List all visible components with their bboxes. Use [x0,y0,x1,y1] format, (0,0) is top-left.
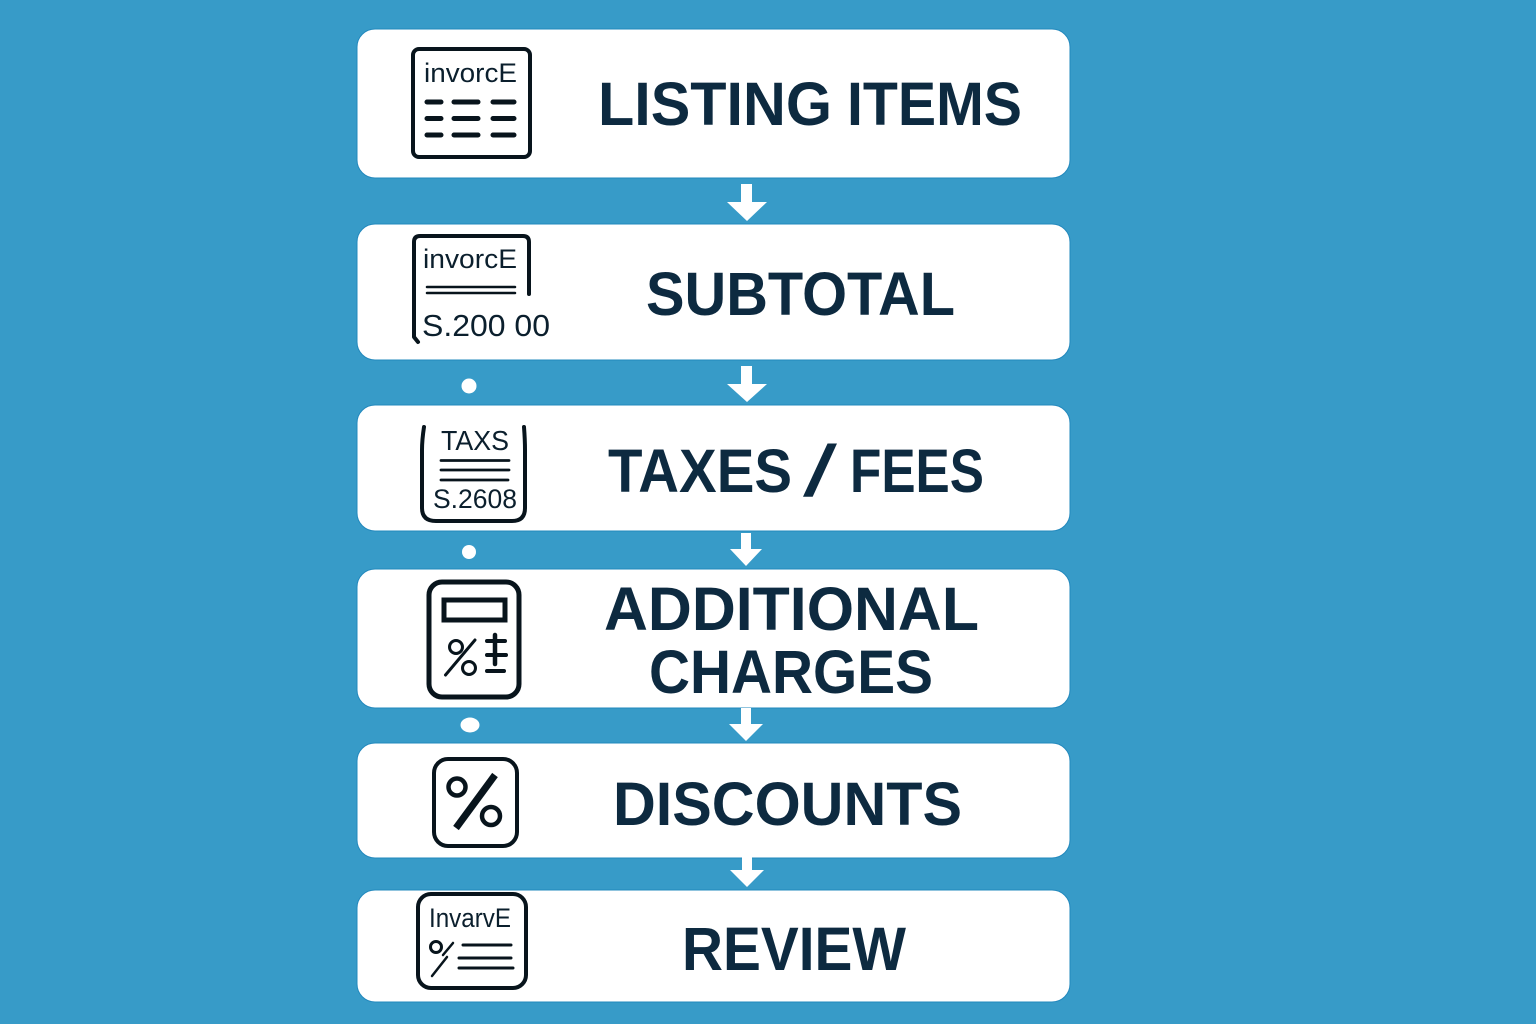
icon: invoice with subtotal amount: invorcE [423,244,517,274]
arrow: discounts to review [730,857,764,887]
icon: invoice review [418,894,526,988]
icon: invoice with subtotal amount: S.200 00 [422,308,550,343]
heading: listing items: LISTING [598,70,832,138]
panel: listing items [357,29,1070,178]
heading: discounts: DISCOUNTS [613,770,962,838]
heading: subtotal: SUBTOTAL [646,260,955,328]
dot: subtotal to taxes [462,378,476,394]
arrow: listing to subtotal [727,184,767,221]
heading: listing items: ITEMS [847,70,1022,138]
icon: calculator [429,582,519,697]
panel: discounts [357,743,1070,858]
icon: tax receipt: S.2608 [433,484,517,514]
icon: tax receipt [422,425,525,521]
heading: additional charges: CHARGES [649,638,933,706]
icon: percent badge [434,759,517,846]
heading: taxes and fees: FEES [850,437,984,505]
icon: invoice with item lines: invorcE [424,58,517,88]
icon: invoice review: InvarvE [429,903,511,933]
arrow: additional charges to discounts [729,708,763,741]
heading: taxes and fees [608,432,984,512]
heading: additional charges: ADDITIONAL [604,575,979,643]
dot: additional charges to discounts [460,718,480,732]
panel: subtotal [357,224,1070,360]
panel: taxes and fees [357,405,1070,531]
panel: additional charges [357,569,1070,708]
arrow: taxes to additional charges [730,533,762,566]
arrow: subtotal to taxes [727,366,767,402]
icon: invoice with item lines [413,49,530,157]
icon: tax receipt: TAXS [441,425,509,456]
heading: taxes and fees: / [803,432,837,512]
icon: invoice with subtotal amount [414,236,550,343]
heading: review: REVIEW [682,915,906,983]
heading: additional charges [604,575,979,706]
panel: review [357,890,1070,1002]
dot: taxes to additional charges [462,545,476,559]
heading: taxes and fees: TAXES [608,437,792,505]
heading: listing items [598,70,1022,138]
